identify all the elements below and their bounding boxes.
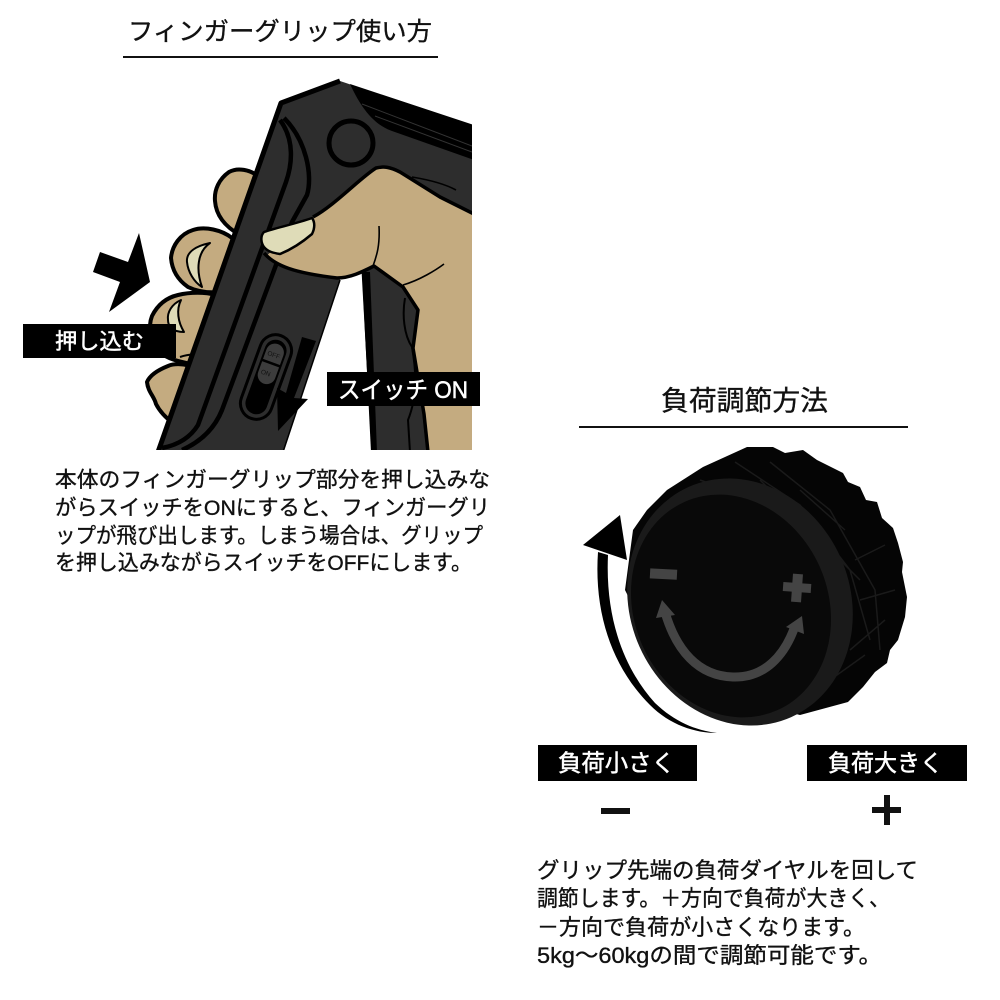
label: increase load: 負荷大きく	[828, 750, 943, 776]
label: decrease load	[538, 745, 697, 781]
illustration: hand pressing finger grip	[147, 81, 474, 452]
text block: dial instructions	[537, 858, 918, 968]
minus mark	[650, 568, 677, 580]
text block: grip instructions	[55, 467, 490, 575]
plus symbol	[872, 795, 901, 825]
knurled back of dial	[625, 447, 907, 715]
top ridge	[350, 84, 474, 160]
text block: dial instructions: －方向で負荷が小さくなります。	[537, 915, 865, 940]
heading: how to use finger grip: フィンガーグリップ使い方	[128, 18, 432, 46]
illustration: load dial	[583, 442, 907, 762]
label: push in	[23, 324, 176, 358]
fingers	[147, 169, 262, 424]
circular button	[329, 121, 373, 165]
label: decrease load: 負荷小さく	[558, 750, 675, 776]
label: switch on: スイッチ ON	[338, 377, 468, 404]
second handle	[363, 265, 428, 452]
heading: load adjustment: 負荷調節方法	[661, 385, 828, 416]
dial rim	[588, 442, 892, 762]
double-headed rotation arrow	[656, 600, 804, 677]
arrow: push in	[93, 233, 150, 312]
text block: grip instructions: がらスイッチをONにすると、フィンガーグリ	[55, 495, 490, 520]
text block: grip instructions: 本体のフィンガーグリップ部分を押し込みな	[55, 467, 490, 492]
label: increase load	[807, 745, 967, 781]
white highlight sliver	[848, 692, 862, 702]
rotation direction arrow	[583, 515, 717, 733]
finger crease	[180, 355, 196, 357]
minus symbol	[601, 808, 630, 814]
palm and thumb	[266, 167, 474, 452]
arrow: slide switch down	[277, 337, 316, 431]
dial face	[596, 462, 866, 750]
text block: grip instructions: を押し込みながらスイッチをOFFにします。	[55, 550, 472, 575]
text block: dial instructions: グリップ先端の負荷ダイヤルを回して	[537, 858, 918, 883]
fingernails	[168, 243, 210, 332]
grooves	[162, 120, 291, 448]
thumbnail	[261, 218, 314, 254]
label: push in: 押し込む	[55, 329, 144, 354]
plus mark	[782, 573, 812, 603]
power switch: OFF	[266, 350, 281, 361]
text block: grip instructions: ップが飛び出します。しまう場合は、グリップ	[55, 523, 483, 548]
power switch	[238, 333, 294, 421]
text block: dial instructions: 調節します。＋方向で負荷が大きく、	[537, 886, 890, 911]
power switch: ON	[260, 369, 272, 379]
text block: dial instructions: 5kg～60kgの間で調節可能です。	[537, 943, 882, 968]
tool body	[158, 81, 474, 452]
